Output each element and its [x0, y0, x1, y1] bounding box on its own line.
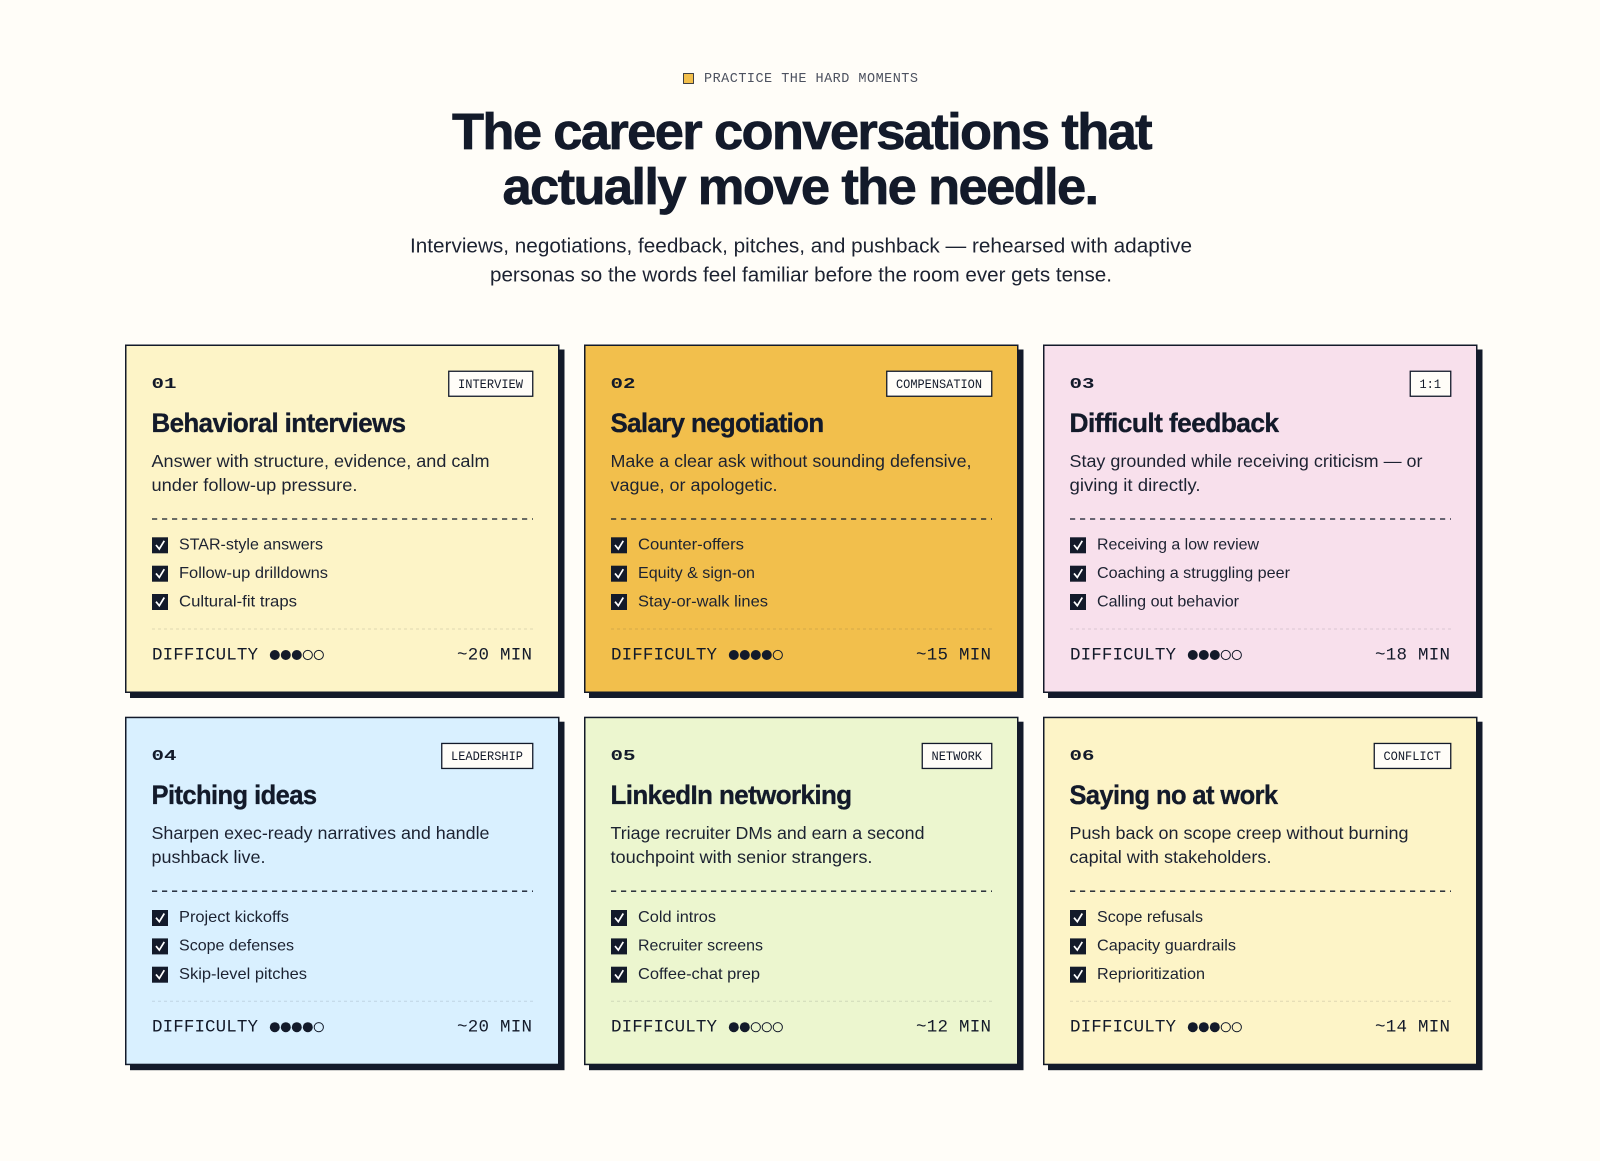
description	[610, 451, 972, 495]
subtitle	[410, 236, 1192, 286]
checklist: Follow-up drilldowns	[179, 565, 328, 582]
header	[410, 72, 1192, 286]
difficulty meter	[611, 1018, 782, 1038]
difficulty meter: DIFFICULTY	[611, 645, 717, 665]
subtitle: Interviews, negotiations, feedback, pitches, and pushback — rehearsed with adaptive	[410, 236, 1192, 258]
tag: CONFLICT	[1384, 750, 1441, 764]
checklist	[152, 536, 328, 610]
tag	[1410, 371, 1451, 396]
panel: card 06 saying no at work: 06	[1070, 748, 1094, 765]
checklist: Scope refusals	[1097, 909, 1203, 926]
description: pushback live.	[152, 847, 266, 867]
panel: card 04 pitching ideas	[126, 717, 564, 1070]
difficulty meter: DIFFICULTY	[152, 1018, 258, 1038]
checklist: Coffee-chat prep	[638, 966, 760, 983]
panel: card 03 difficult feedback: 03	[1070, 376, 1094, 393]
description: under follow-up pressure.	[152, 475, 358, 495]
checklist: Receiving a low review	[1097, 536, 1259, 553]
card title: Behavioral interviews	[152, 408, 406, 438]
description	[152, 451, 490, 495]
description: vague, or apologetic.	[610, 475, 778, 495]
description: Push back on scope creep without burning	[1070, 823, 1408, 843]
description	[152, 823, 490, 867]
checklist: Equity & sign-on	[638, 565, 755, 582]
difficulty meter	[152, 1018, 323, 1038]
card title: Saying no at work	[1070, 780, 1278, 810]
difficulty meter: DIFFICULTY	[611, 1018, 717, 1038]
panel: card 02 salary negotiation: 02	[610, 376, 636, 393]
description: capital with stakeholders.	[1070, 847, 1271, 867]
description: Stay grounded while receiving criticism — or	[1070, 451, 1423, 471]
checklist: Stay-or-walk lines	[638, 593, 768, 610]
tag: NETWORK	[932, 750, 982, 764]
checklist: Project kickoffs	[179, 909, 289, 926]
checklist	[611, 909, 763, 983]
description	[1070, 823, 1408, 867]
duration: ~15 MIN	[916, 645, 991, 665]
tag: 1:1	[1420, 378, 1441, 392]
panel: card 06 saying no at work	[1044, 717, 1482, 1070]
panel: card 04 pitching ideas: 04	[152, 748, 176, 765]
difficulty meter	[1070, 645, 1241, 665]
tag: INTERVIEW	[458, 378, 523, 392]
difficulty meter	[611, 645, 782, 665]
panel: card 05 linkedin networking	[585, 717, 1024, 1070]
description: Sharpen exec-ready narratives and handle	[152, 823, 490, 843]
eyebrow: PRACTICE THE HARD MOMENTS	[704, 72, 918, 87]
checklist: Reprioritization	[1097, 966, 1205, 983]
description: Triage recruiter DMs and earn a second	[610, 823, 924, 843]
title	[452, 103, 1153, 215]
title: The career conversations that	[452, 103, 1153, 160]
tag	[1374, 743, 1451, 768]
duration: ~18 MIN	[1375, 645, 1450, 665]
description: Make a clear ask without sounding defensive,	[610, 451, 972, 471]
tag	[449, 371, 533, 396]
tag: LEADERSHIP	[451, 750, 523, 764]
checklist: Cold intros	[638, 909, 716, 926]
checklist: Counter-offers	[638, 536, 744, 553]
card title: LinkedIn networking	[610, 780, 852, 810]
checklist: Skip-level pitches	[179, 966, 307, 983]
tag	[442, 743, 533, 768]
card title: Pitching ideas	[152, 780, 316, 810]
checklist: Cultural-fit traps	[179, 593, 297, 610]
panel: card 01 behavioral interviews: 01	[152, 376, 176, 393]
duration: ~14 MIN	[1375, 1018, 1450, 1038]
description	[1070, 451, 1423, 495]
panel: card 02 salary negotiation	[585, 345, 1024, 698]
tag: COMPENSATION	[896, 378, 982, 392]
duration: ~20 MIN	[457, 645, 532, 665]
difficulty meter	[152, 645, 323, 665]
tag	[922, 743, 992, 768]
panel: card 05 linkedin networking: 05	[610, 748, 636, 765]
difficulty meter: DIFFICULTY	[152, 645, 258, 665]
tag	[887, 371, 992, 396]
checklist: Scope defenses	[179, 938, 294, 955]
card title: Difficult feedback	[1070, 408, 1279, 438]
card title: Salary negotiation	[610, 408, 824, 438]
checklist: Coaching a struggling peer	[1097, 565, 1291, 582]
description: touchpoint with senior strangers.	[610, 847, 872, 867]
subtitle: personas so the words feel familiar before the room ever gets tense.	[490, 264, 1112, 286]
checklist: STAR-style answers	[179, 536, 323, 553]
panel: card 03 difficult feedback	[1044, 345, 1482, 698]
checklist: Calling out behavior	[1097, 593, 1240, 610]
duration: ~20 MIN	[457, 1018, 532, 1038]
panel: card 01 behavioral interviews	[126, 345, 564, 698]
difficulty meter: DIFFICULTY	[1070, 645, 1176, 665]
title: actually move the needle.	[502, 158, 1098, 215]
checklist	[152, 909, 307, 983]
checklist	[1070, 536, 1291, 610]
checklist	[1070, 909, 1236, 983]
description	[610, 823, 924, 867]
checklist	[611, 536, 768, 610]
difficulty meter: DIFFICULTY	[1070, 1018, 1176, 1038]
checklist: Capacity guardrails	[1097, 938, 1236, 955]
difficulty meter	[1070, 1018, 1241, 1038]
duration: ~12 MIN	[916, 1018, 991, 1038]
checklist: Recruiter screens	[638, 938, 763, 955]
description: Answer with structure, evidence, and calm	[152, 451, 490, 471]
description: giving it directly.	[1070, 475, 1200, 495]
